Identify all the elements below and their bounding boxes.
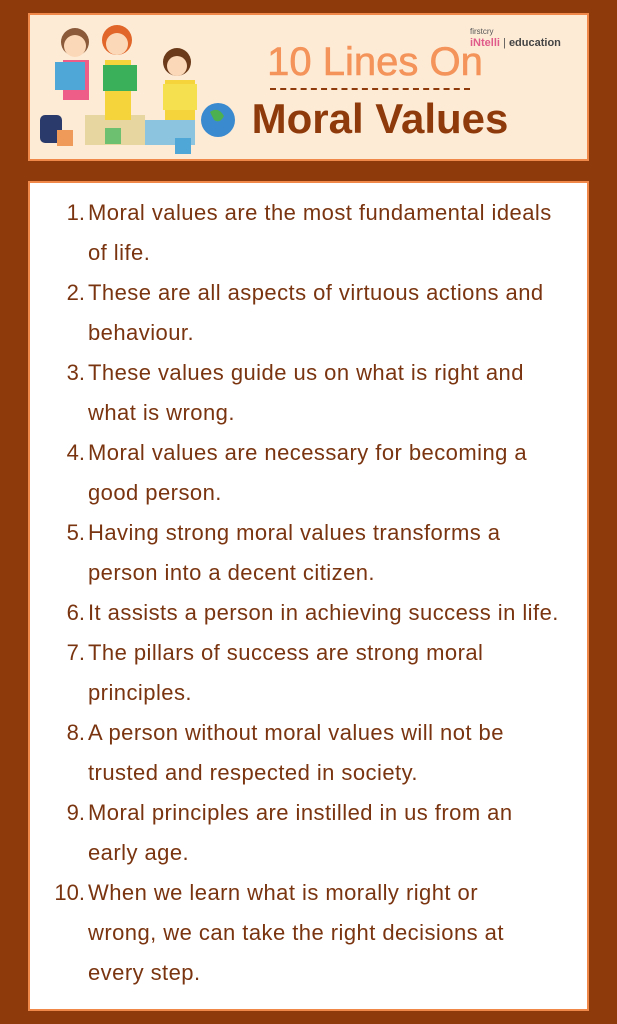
panel: list of lines: person into a decent citizen. xyxy=(88,560,375,585)
panel: list of lines: A person without moral values will not be xyxy=(88,720,504,745)
panel: list of lines: every step. xyxy=(88,960,201,985)
panel: list of lines: The pillars of success are strong moral xyxy=(88,640,483,665)
logo: iNtelli | education xyxy=(470,37,561,49)
panel: list of lines: good person. xyxy=(88,480,222,505)
panel: list of lines: 1. xyxy=(67,200,85,225)
panel: list of lines: 6. xyxy=(67,600,85,625)
panel: list of lines: early age. xyxy=(88,840,189,865)
panel: list of lines: 9. xyxy=(67,800,85,825)
panel: list of lines: 5. xyxy=(67,520,85,545)
title line 1: 10 Lines On xyxy=(267,40,483,84)
panel: list of lines: These are all aspects of virtuous actions and xyxy=(88,280,544,305)
panel: list of lines: what is wrong. xyxy=(88,400,235,425)
panel: list of lines: of life. xyxy=(88,240,150,265)
panel: list of lines: Moral principles are instilled in us from an xyxy=(88,800,513,825)
illustration: children reading xyxy=(40,25,235,154)
header panel xyxy=(28,13,589,161)
panel: list of lines: These values guide us on what is right and xyxy=(88,360,524,385)
panel: list of lines: 10. xyxy=(54,880,85,905)
panel: list of lines: 8. xyxy=(67,720,85,745)
panel: list of lines xyxy=(28,181,589,1011)
title line 2: Moral Values xyxy=(252,95,508,142)
panel: list of lines: wrong, we can take the right decisions at xyxy=(88,920,504,945)
panel: list of lines: trusted and respected in society. xyxy=(88,760,418,785)
panel: list of lines: It assists a person in achieving success in life. xyxy=(88,600,559,625)
panel: list of lines: behaviour. xyxy=(88,320,194,345)
logo: firstcry xyxy=(470,27,494,36)
panel: list of lines: principles. xyxy=(88,680,192,705)
panel: list of lines: Moral values are the most fundamental ideals xyxy=(88,200,552,225)
logo xyxy=(470,27,561,49)
panel: list of lines: 2. xyxy=(67,280,85,305)
panel: list of lines: 3. xyxy=(67,360,85,385)
panel: list of lines: Having strong moral values transforms a xyxy=(88,520,500,545)
panel: list of lines: When we learn what is morally right or xyxy=(88,880,478,905)
panel: list of lines: 4. xyxy=(67,440,85,465)
panel: list of lines: Moral values are necessary for becoming a xyxy=(88,440,527,465)
panel: list of lines: 7. xyxy=(67,640,85,665)
